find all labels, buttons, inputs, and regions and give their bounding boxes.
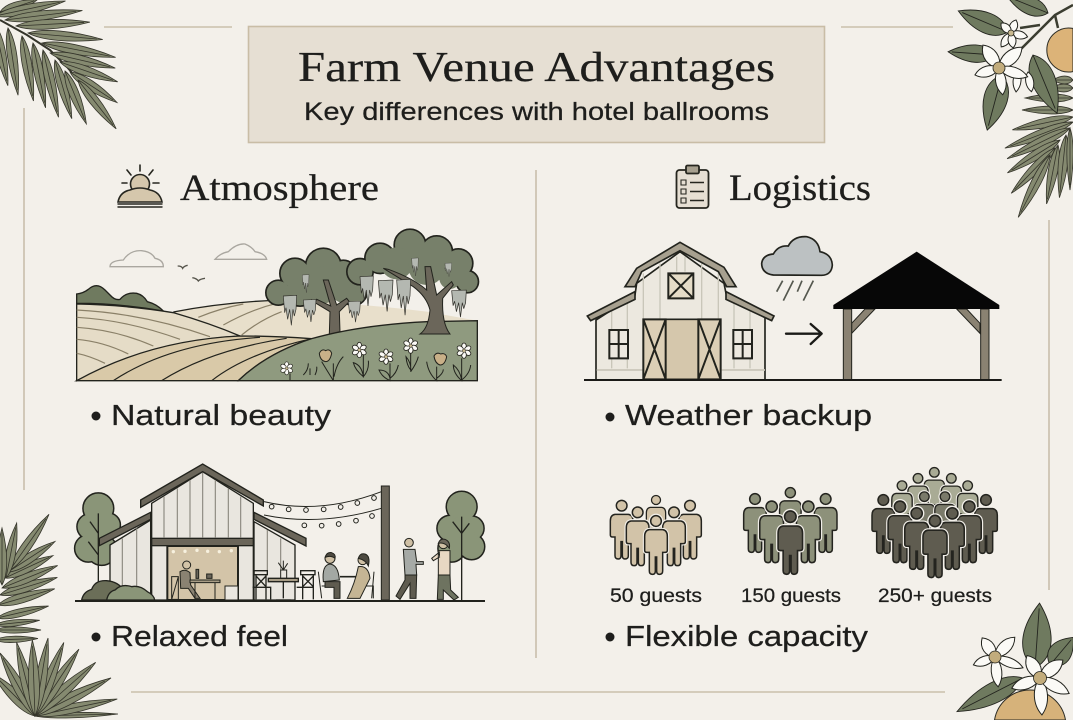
- barn walls: [152, 472, 253, 600]
- heading: Atmosphere: Atmosphere: [180, 168, 379, 209]
- bullet: Natural beauty: Natural beauty: [111, 400, 332, 432]
- illustration: rolling farm landscape: [77, 230, 478, 381]
- orange blossom branch: top right: [948, 0, 1073, 133]
- orange blossom branch: bottom right: [952, 602, 1073, 720]
- title: Farm Venue Advantages: [298, 45, 775, 91]
- barn roofs: [141, 464, 263, 507]
- crowd: 150 guests: [744, 487, 837, 574]
- bullet: Weather backup: Weather backup: [625, 400, 872, 432]
- crowd: 250+ guests: [872, 467, 997, 578]
- arrow: [786, 324, 822, 344]
- rain cloud: [762, 237, 832, 301]
- left oak tree: [266, 249, 367, 334]
- illustration: barn with patio and guests: [75, 464, 485, 601]
- icon: sunrise: [118, 165, 162, 207]
- left tree: [75, 493, 120, 590]
- icon: clipboard: [676, 166, 708, 208]
- bushes: [82, 581, 155, 600]
- palm: bottom left fan: [0, 637, 118, 720]
- green hill: [238, 321, 477, 381]
- string lights: [264, 492, 381, 528]
- ground line: [75, 598, 485, 604]
- barn interior: [167, 546, 238, 600]
- pavilion: [833, 252, 999, 380]
- label: 50 guests: 50 guests: [610, 586, 702, 607]
- illustration: barn, rain and covered pavilion: [584, 237, 1002, 380]
- left hill: [77, 304, 240, 381]
- pole: [381, 486, 389, 600]
- clouds and birds: [110, 244, 267, 281]
- label: 250+ guests: 250+ guests: [878, 586, 992, 607]
- crowd: 50 guests: [610, 495, 701, 574]
- ground: [584, 377, 1002, 383]
- bullet: Relaxed feel: Relaxed feel: [111, 621, 288, 653]
- bush: [77, 286, 163, 311]
- seated couple: [318, 553, 374, 598]
- palm: bottom left upper: [0, 512, 59, 643]
- label: 150 guests: 150 guests: [741, 586, 841, 607]
- right oak tree: [347, 230, 478, 334]
- standing guests: [396, 538, 458, 600]
- bullet: Flexible capacity: Flexible capacity: [625, 621, 869, 653]
- back field: [173, 300, 477, 338]
- right tree: [437, 492, 484, 600]
- palm: top right corner: [1003, 76, 1073, 220]
- people icons: guest capacity: [610, 467, 997, 578]
- subtitle: Key differences with hotel ballrooms: [304, 98, 769, 126]
- palm: top left corner: [0, 0, 120, 132]
- heading: Logistics: Logistics: [729, 168, 871, 209]
- seated person inside barn: [172, 561, 238, 600]
- patio table and chairs: [253, 561, 315, 600]
- wildflowers: [280, 338, 472, 381]
- barn: [587, 242, 774, 380]
- title panel: [248, 26, 824, 142]
- front field: [77, 336, 312, 381]
